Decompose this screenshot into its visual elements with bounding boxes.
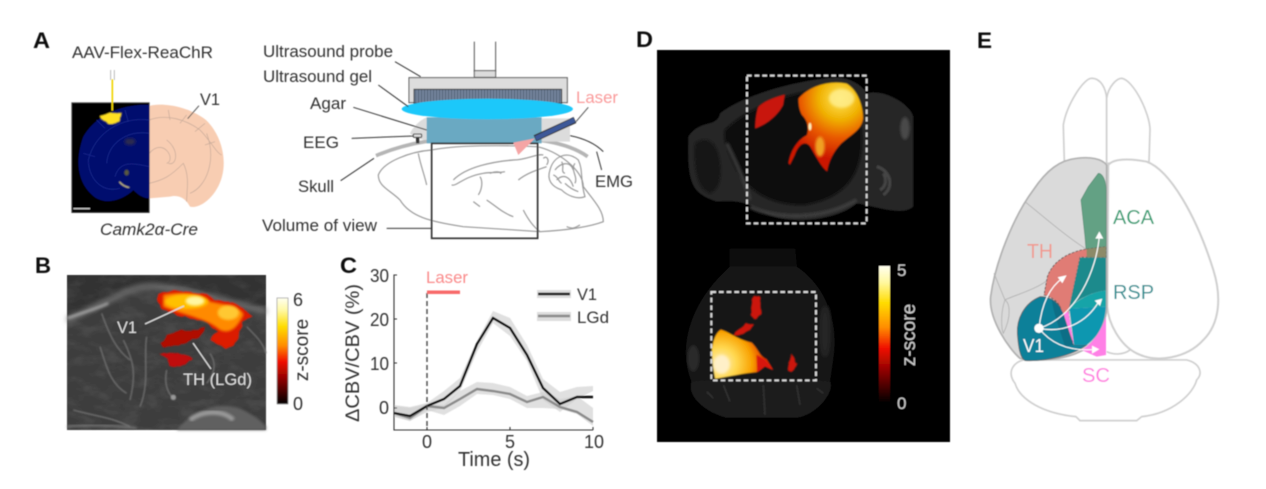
panel C: CBV time course chart (340, 253, 609, 471)
laser cone (513, 138, 535, 155)
midline hump (1107, 350, 1130, 354)
x tick labels: 0 (422, 432, 432, 452)
x axis title: Time (s) (458, 449, 530, 471)
panel B: fUS activation map (35, 253, 313, 430)
legend: V1 (577, 286, 597, 304)
TH leader (193, 343, 211, 369)
panel D: whole-brain activation maps (636, 27, 950, 442)
label: SC: SC (1082, 365, 1110, 387)
label: Laser: Laser (576, 88, 618, 107)
colour bar D (879, 266, 890, 403)
colour bar max: 6 (293, 290, 303, 310)
y tick labels: 0 (379, 398, 389, 418)
sagittal mouse brain outline (378, 146, 603, 232)
skull arc (376, 137, 588, 157)
label: Camk2a-Cre: Camk2α-Cre (100, 220, 198, 239)
LGd line (394, 389, 593, 422)
connection arrows (1039, 236, 1099, 350)
V1 overlap (1052, 299, 1073, 347)
leader lines (341, 62, 588, 228)
region: RSP lower (1069, 307, 1106, 345)
label: Ultrasound probe: Ultrasound probe (263, 42, 393, 61)
label: ACA: ACA (1113, 207, 1155, 229)
panel letter C: C (340, 253, 357, 278)
icon: injection pipette (111, 70, 114, 111)
right hemisphere (1107, 159, 1218, 358)
region: RSP band (1069, 291, 1106, 309)
EMG wire (570, 136, 603, 170)
sagittal brain silhouette (688, 77, 913, 220)
dorsal brain diagram (990, 78, 1218, 421)
label: RSP: RSP (1113, 282, 1154, 304)
laser bar (427, 290, 460, 294)
panel letter B: B (35, 253, 51, 278)
label: EMG: EMG (595, 172, 633, 191)
horizontal dashed box (711, 292, 816, 380)
colour bar D title: z-score (899, 304, 920, 366)
cerebellum (1011, 360, 1200, 421)
region: TH (1044, 247, 1106, 345)
EEG screw (413, 134, 422, 143)
label: Agar: Agar (310, 94, 346, 113)
ultrasound imaging schematic (341, 42, 603, 238)
y tick labels: 20 (370, 310, 389, 330)
olfactory bulbs (1063, 78, 1150, 163)
activation heat map (158, 291, 253, 367)
ultrasound probe body (409, 42, 567, 103)
x tick labels: 10 (584, 432, 604, 452)
sagittal activation heat map (755, 82, 863, 172)
region: SC (1063, 312, 1106, 357)
V1 leader (145, 306, 184, 324)
label: AAV-Flex-ReaChR: AAV-Flex-ReaChR (72, 43, 213, 62)
laser fibre (535, 120, 575, 138)
panel letter D: D (636, 27, 653, 52)
label: V1 in image: V1 (117, 319, 137, 337)
horizontal brain view (686, 249, 835, 418)
axes (394, 275, 593, 430)
peach atlas hemisphere (149, 105, 224, 207)
ultrasound gel ellipse (402, 99, 573, 119)
ultrasound coronal background image (67, 275, 266, 430)
colour bar D min: 0 (897, 394, 906, 413)
black image background (657, 50, 950, 442)
legend (537, 286, 609, 327)
region: ACA (1081, 173, 1106, 257)
x tick labels: 5 (505, 432, 515, 452)
agar block (427, 117, 542, 143)
legend: LGd (577, 308, 609, 327)
coronal brain section illustration (72, 70, 224, 213)
colour bar min: 0 (293, 394, 303, 414)
region: V1 (1017, 297, 1087, 361)
sagittal dashed box (747, 76, 867, 223)
side agar wings (410, 117, 570, 142)
panel E: brain network diagram (977, 28, 1218, 421)
error bands (394, 311, 593, 426)
arrowheads (1058, 231, 1103, 354)
label: Ultrasound gel: Ultrasound gel (263, 67, 372, 86)
label: V1: V1 (200, 91, 220, 109)
horizontal brain silhouette (686, 249, 835, 418)
V1 source dot (1034, 324, 1044, 333)
region: RSP upper (1069, 258, 1106, 307)
y tick labels (370, 266, 389, 418)
label: Skull: Skull (298, 177, 334, 196)
sagittal brain view (688, 76, 913, 223)
y axis title: ΔCBV/CBV (%) (342, 284, 364, 422)
label: EEG: EEG (303, 133, 339, 152)
V1 leader line (188, 106, 199, 119)
panel letter A: A (33, 28, 50, 53)
colour bar D max: 5 (897, 261, 906, 280)
TH ACA overlap (1087, 247, 1106, 257)
V1 line (394, 318, 593, 416)
colour bar (277, 298, 288, 404)
left hemisphere (990, 158, 1107, 360)
stimulus onset dashed line (426, 293, 428, 430)
label: V1 in diagram: V1 (1023, 336, 1044, 356)
x tick labels (422, 432, 604, 452)
colour bar title: z-score (292, 319, 313, 381)
label: Laser in chart: Laser (426, 268, 468, 287)
horizontal activation heat map (712, 296, 797, 379)
fluorescence histology image (72, 103, 149, 213)
y tick labels: 30 (370, 266, 389, 286)
label: Volume of view: Volume of view (262, 216, 378, 235)
panel A: injection histology and imaging setup (33, 28, 633, 239)
panel letter E: E (977, 28, 992, 53)
label: TH (LGd): TH (LGd) (183, 371, 252, 389)
y tick labels: 10 (370, 354, 389, 374)
volume of view box (432, 143, 538, 238)
label: TH: TH (1027, 241, 1053, 263)
